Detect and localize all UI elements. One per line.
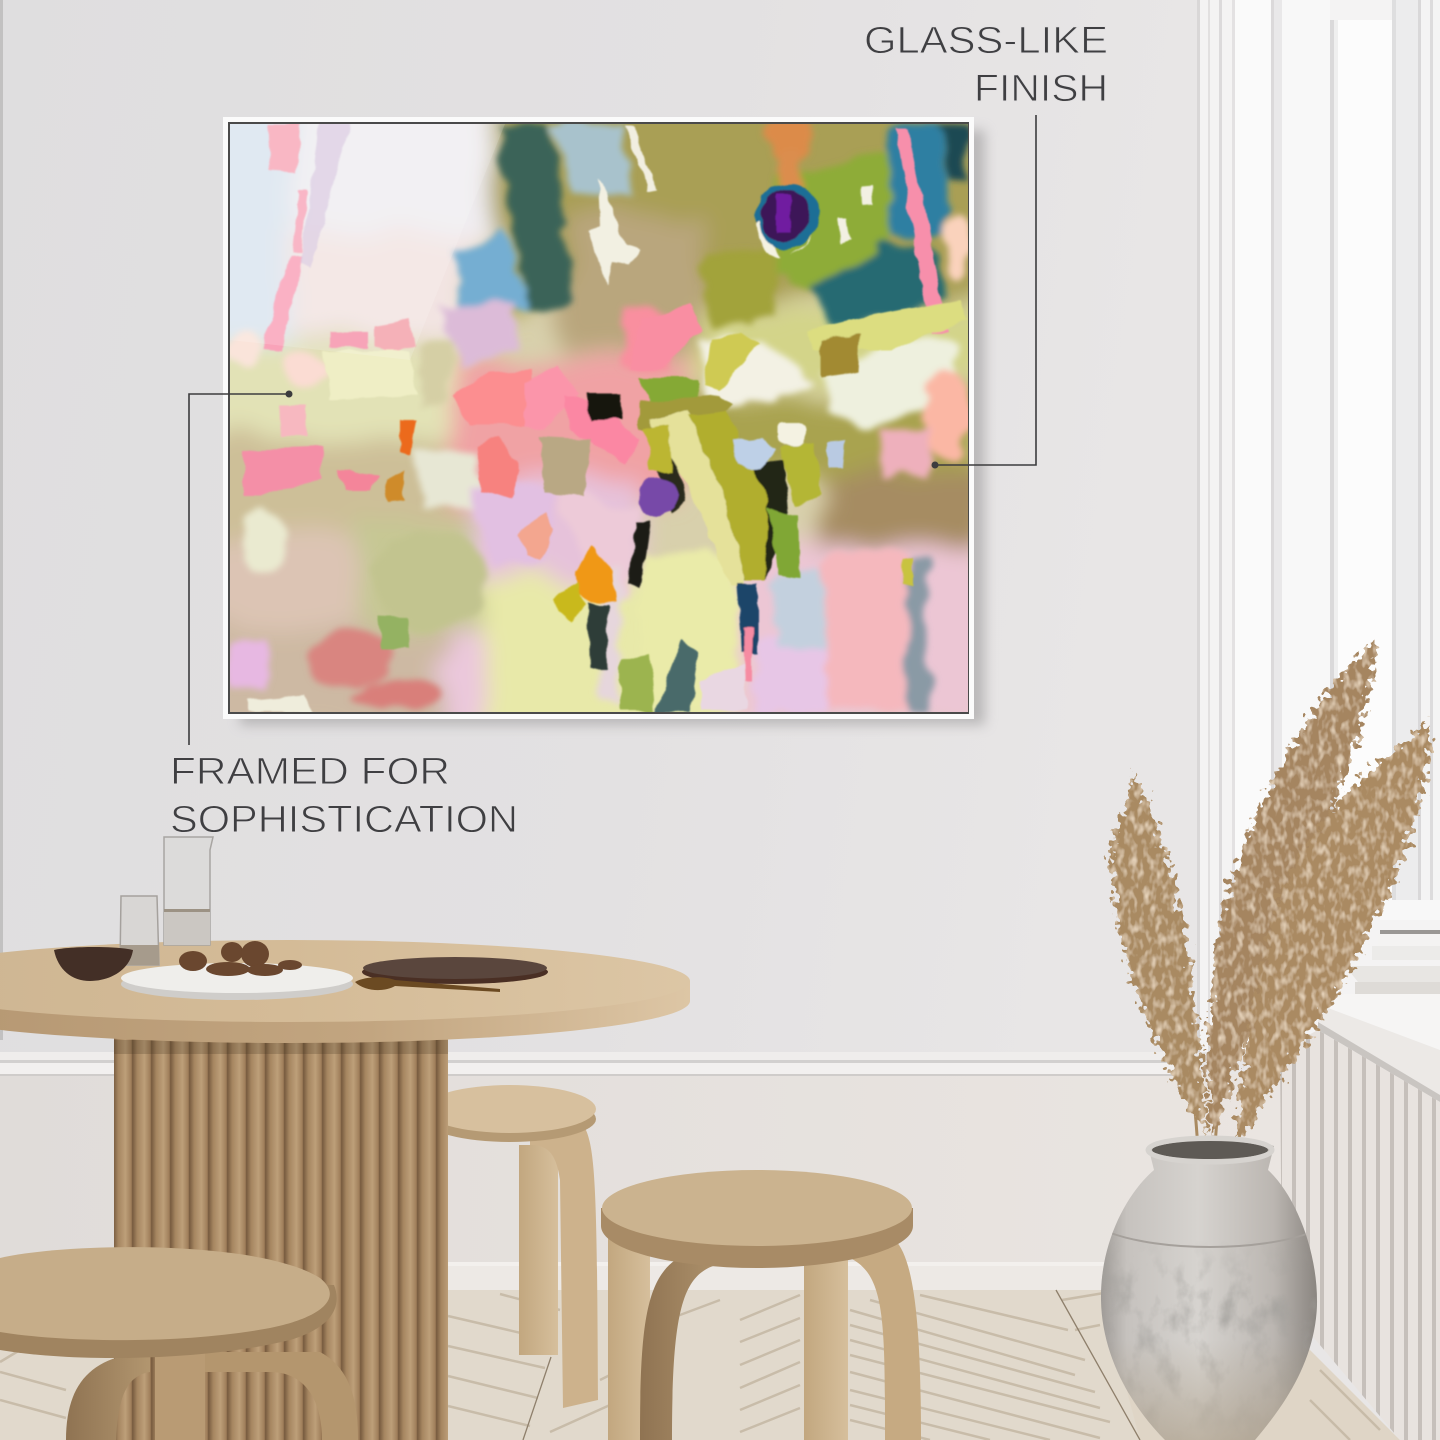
dark bowl: [54, 947, 133, 981]
glass carafe: [164, 837, 213, 945]
glass reflection: [264, 124, 505, 360]
window sill with books: [1318, 930, 1440, 1102]
pampas grass: [1110, 640, 1430, 1150]
callout heading: FRAMED FOR: [170, 751, 450, 793]
frame shadow: [240, 130, 985, 725]
painting: [230, 124, 968, 712]
wainscot panel: [0, 1052, 1290, 1294]
back stool: [424, 1085, 598, 1408]
rough brush strokes: [244, 124, 968, 712]
spoon: [355, 977, 500, 992]
soft painted masses: [229, 114, 972, 712]
tableware: [54, 837, 548, 1000]
base washes: [230, 124, 968, 712]
round table top: [0, 940, 690, 1043]
callout heading: [864, 20, 1108, 110]
drinking glass: [120, 896, 159, 965]
marble plate: [121, 968, 353, 1000]
callout heading: FINISH: [974, 68, 1108, 110]
callout: glass-like finish: [864, 20, 1108, 468]
floor: [0, 1290, 1400, 1440]
dark wooden plate: [362, 960, 548, 984]
pedestal table base: [114, 1030, 448, 1440]
panel: framed painting: [223, 117, 974, 719]
callout heading: SOPHISTICATION: [170, 799, 518, 841]
plume middle: [1207, 640, 1375, 1140]
plume left: [1110, 775, 1206, 1135]
callout heading: GLASS-LIKE: [864, 20, 1108, 62]
callout heading: [170, 751, 518, 841]
plume right: [1238, 722, 1430, 1142]
white frame: [223, 117, 974, 719]
nuts: [179, 941, 302, 976]
front stool: [601, 1170, 921, 1440]
left stool: [0, 1247, 358, 1440]
window and moulding: [1197, 0, 1440, 1052]
stoneware vase: [1095, 1138, 1325, 1440]
callout: framed for sophistication: [170, 390, 518, 841]
radiator: [1280, 1030, 1440, 1440]
